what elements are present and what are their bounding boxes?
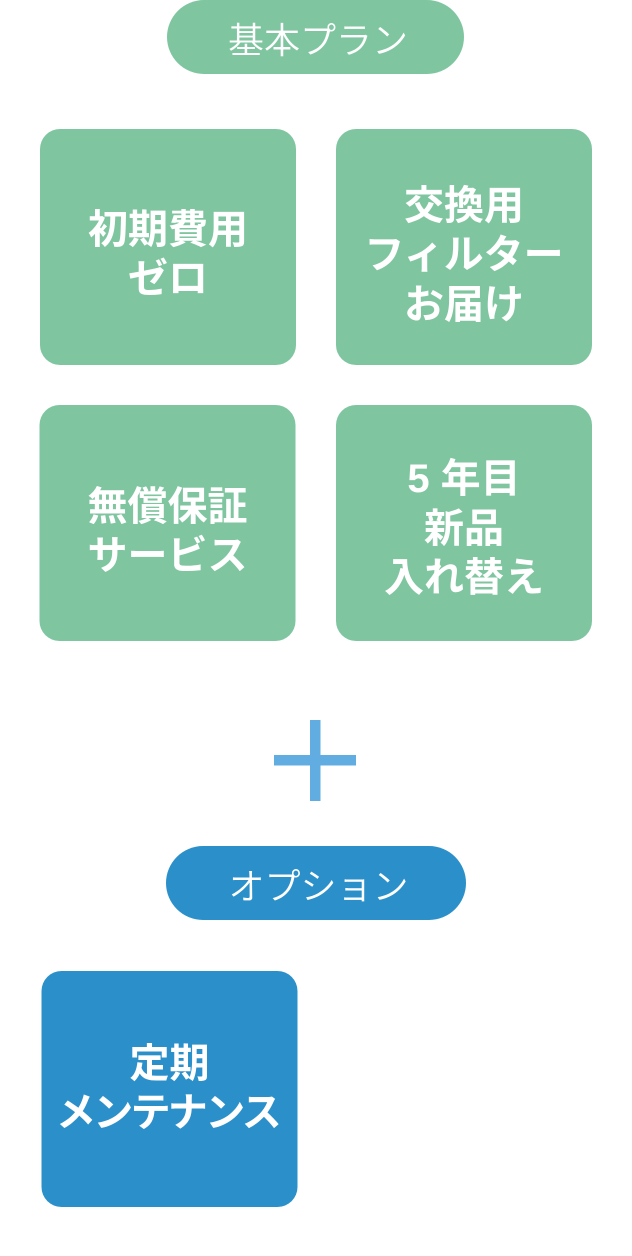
card: regular maintenance: メンテナンス <box>56 1091 279 1135</box>
icon: plus sign <box>274 720 356 801</box>
card: free warranty service: サービス <box>88 534 248 578</box>
card: zero initial cost <box>40 129 296 365</box>
card: regular maintenance <box>42 971 298 1207</box>
card: free warranty service <box>40 405 296 641</box>
card: free warranty service: 無償保証 <box>88 484 248 528</box>
card: zero initial cost: 初期費用 <box>88 208 248 252</box>
heading: basic plan: 基本プラン <box>228 20 408 61</box>
card: replacement filter delivery <box>336 129 592 365</box>
card: replacement filter delivery: お届け <box>404 283 524 327</box>
card: zero initial cost: ゼロ <box>128 257 208 301</box>
card: regular maintenance: 定期 <box>130 1042 210 1086</box>
card: new unit after five years: 5 年目 <box>407 457 521 501</box>
card: new unit after five years: 新品 <box>424 507 504 551</box>
heading: basic plan <box>167 0 464 74</box>
card: replacement filter delivery: フィルター <box>364 233 564 277</box>
heading: option: オプション <box>228 866 408 907</box>
card: new unit after five years <box>336 405 592 641</box>
card: replacement filter delivery: 交換用 <box>404 184 524 228</box>
card: new unit after five years: 入れ替え <box>384 556 544 600</box>
heading: option <box>166 846 466 920</box>
